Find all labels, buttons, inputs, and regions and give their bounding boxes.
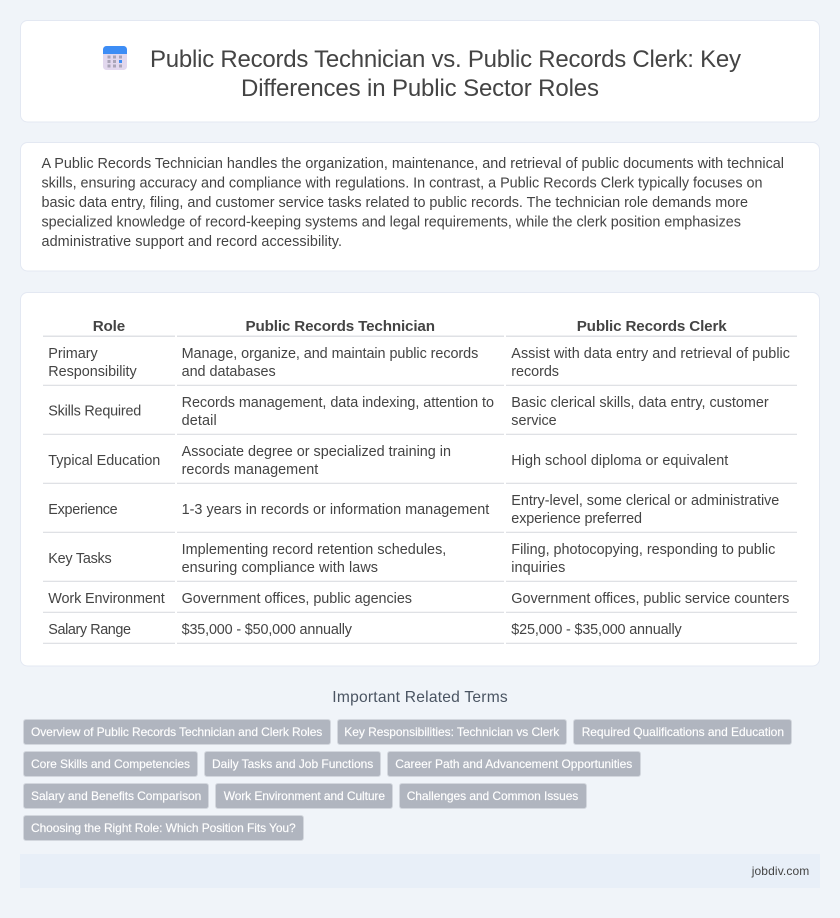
table header: Role <box>93 318 125 335</box>
row: skills required: Basic clerical skills, data entry, customer <box>511 395 769 411</box>
row: typical education: Associate degree or specialized training in <box>182 444 451 460</box>
title: Public Records Technician vs. Public Records Clerk: Key <box>150 46 741 73</box>
row: skills required: service <box>511 413 557 429</box>
title: Differences in Public Sector Roles <box>241 75 599 102</box>
tag: daily tasks: Daily Tasks and Job Functions <box>212 757 373 771</box>
row: skills required: Records management, data indexing, attention to <box>182 395 494 411</box>
row: key tasks: Filing, photocopying, responding to public <box>511 542 775 558</box>
row: salary range: Salary Range <box>48 622 131 638</box>
text block: intro paragraph: specialized knowledge of record-keeping systems and legal requirements, while the clerk position emphasizes <box>42 214 741 230</box>
row: work environment <box>43 591 797 613</box>
row: key tasks: ensuring compliance with laws <box>182 560 378 576</box>
tag: challenges <box>400 784 586 808</box>
row: work environment: Government offices, public agencies <box>182 591 412 607</box>
panel: title header <box>20 20 820 122</box>
row: typical education: Typical Education <box>48 453 160 469</box>
tag: salary and benefits <box>24 784 208 808</box>
row: experience: 1-3 years in records or information management <box>182 502 489 518</box>
table header: Public Records Clerk <box>577 318 727 335</box>
row: key tasks: Key Tasks <box>48 551 112 567</box>
row: primary responsibility: Primary <box>48 346 98 362</box>
row: key tasks: inquiries <box>511 560 565 576</box>
footer <box>20 854 820 888</box>
row: primary responsibility: records <box>511 364 559 380</box>
text block: intro paragraph: A Public Records Technician handles the organization, maintenance, and retrieval of public documents with technical <box>42 156 784 172</box>
row: experience: Entry-level, some clerical or administrative <box>511 493 779 509</box>
panel: introduction <box>20 142 820 271</box>
row: primary responsibility: and databases <box>182 364 276 380</box>
tag: overview: Overview of Public Records Technician and Clerk Roles <box>31 725 322 739</box>
table header <box>43 318 797 337</box>
row: salary range: $35,000 - $50,000 annually <box>182 622 353 638</box>
text block: intro paragraph: skills, ensuring accuracy and compliance with regulations. In contrast, a Public Records Clerk typically focuses on <box>42 176 762 192</box>
title <box>150 46 741 102</box>
row: skills required: Skills Required <box>48 404 141 420</box>
row: primary responsibility <box>43 346 797 386</box>
row: experience: Experience <box>48 502 118 518</box>
row: skills required: detail <box>182 413 217 429</box>
row: primary responsibility: Responsibility <box>48 364 137 380</box>
tag: choosing the right role: Choosing the Right Role: Which Position Fits You? <box>31 821 296 835</box>
panel: comparison table <box>20 292 820 666</box>
tag: key responsibilities <box>338 720 566 744</box>
row: typical education <box>43 444 797 484</box>
tag: core skills: Core Skills and Competencies <box>31 757 190 771</box>
row: typical education: records management <box>182 462 318 478</box>
tag: career path <box>388 752 640 776</box>
tag: salary and benefits: Salary and Benefits Comparison <box>31 789 201 803</box>
row: salary range: $25,000 - $35,000 annually <box>511 622 682 638</box>
row: experience <box>43 493 797 533</box>
tag: challenges: Challenges and Common Issues <box>407 789 578 803</box>
row: typical education: High school diploma or equivalent <box>511 453 728 469</box>
row: work environment: Government offices, public service counters <box>511 591 789 607</box>
text block: intro paragraph: administrative support and record accessibility. <box>42 234 342 250</box>
tag: core skills <box>24 752 198 776</box>
icon: calendar <box>103 46 127 70</box>
footer: jobdiv.com <box>751 864 809 878</box>
tag: overview <box>24 720 330 744</box>
heading: important related terms: Important Related Terms <box>332 689 508 706</box>
row: primary responsibility: Assist with data entry and retrieval of public <box>511 346 790 362</box>
tag: qualifications <box>574 720 792 744</box>
row: skills required <box>43 395 797 435</box>
row: salary range <box>43 622 797 644</box>
tag: choosing the right role <box>24 816 304 840</box>
row: experience: experience preferred <box>511 511 642 527</box>
tag: qualifications: Required Qualifications and Education <box>582 725 784 739</box>
row: primary responsibility: Manage, organize, and maintain public records <box>182 346 478 362</box>
tag: work environment: Work Environment and Culture <box>224 789 385 803</box>
table header: Public Records Technician <box>246 318 435 335</box>
tag: key responsibilities: Key Responsibilities: Technician vs Clerk <box>344 725 560 739</box>
text block: intro paragraph <box>42 156 784 250</box>
text block: intro paragraph: basic data entry, filing, and customer service tasks related to public records. The technician role demands more <box>42 195 748 211</box>
related terms tags <box>24 720 792 840</box>
row: key tasks: Implementing record retention schedules, <box>182 542 446 558</box>
row: key tasks <box>43 542 797 582</box>
row: work environment: Work Environment <box>48 591 165 607</box>
tag: daily tasks <box>204 752 380 776</box>
tag: career path: Career Path and Advancement Opportunities <box>395 757 632 771</box>
tag: work environment <box>216 784 392 808</box>
